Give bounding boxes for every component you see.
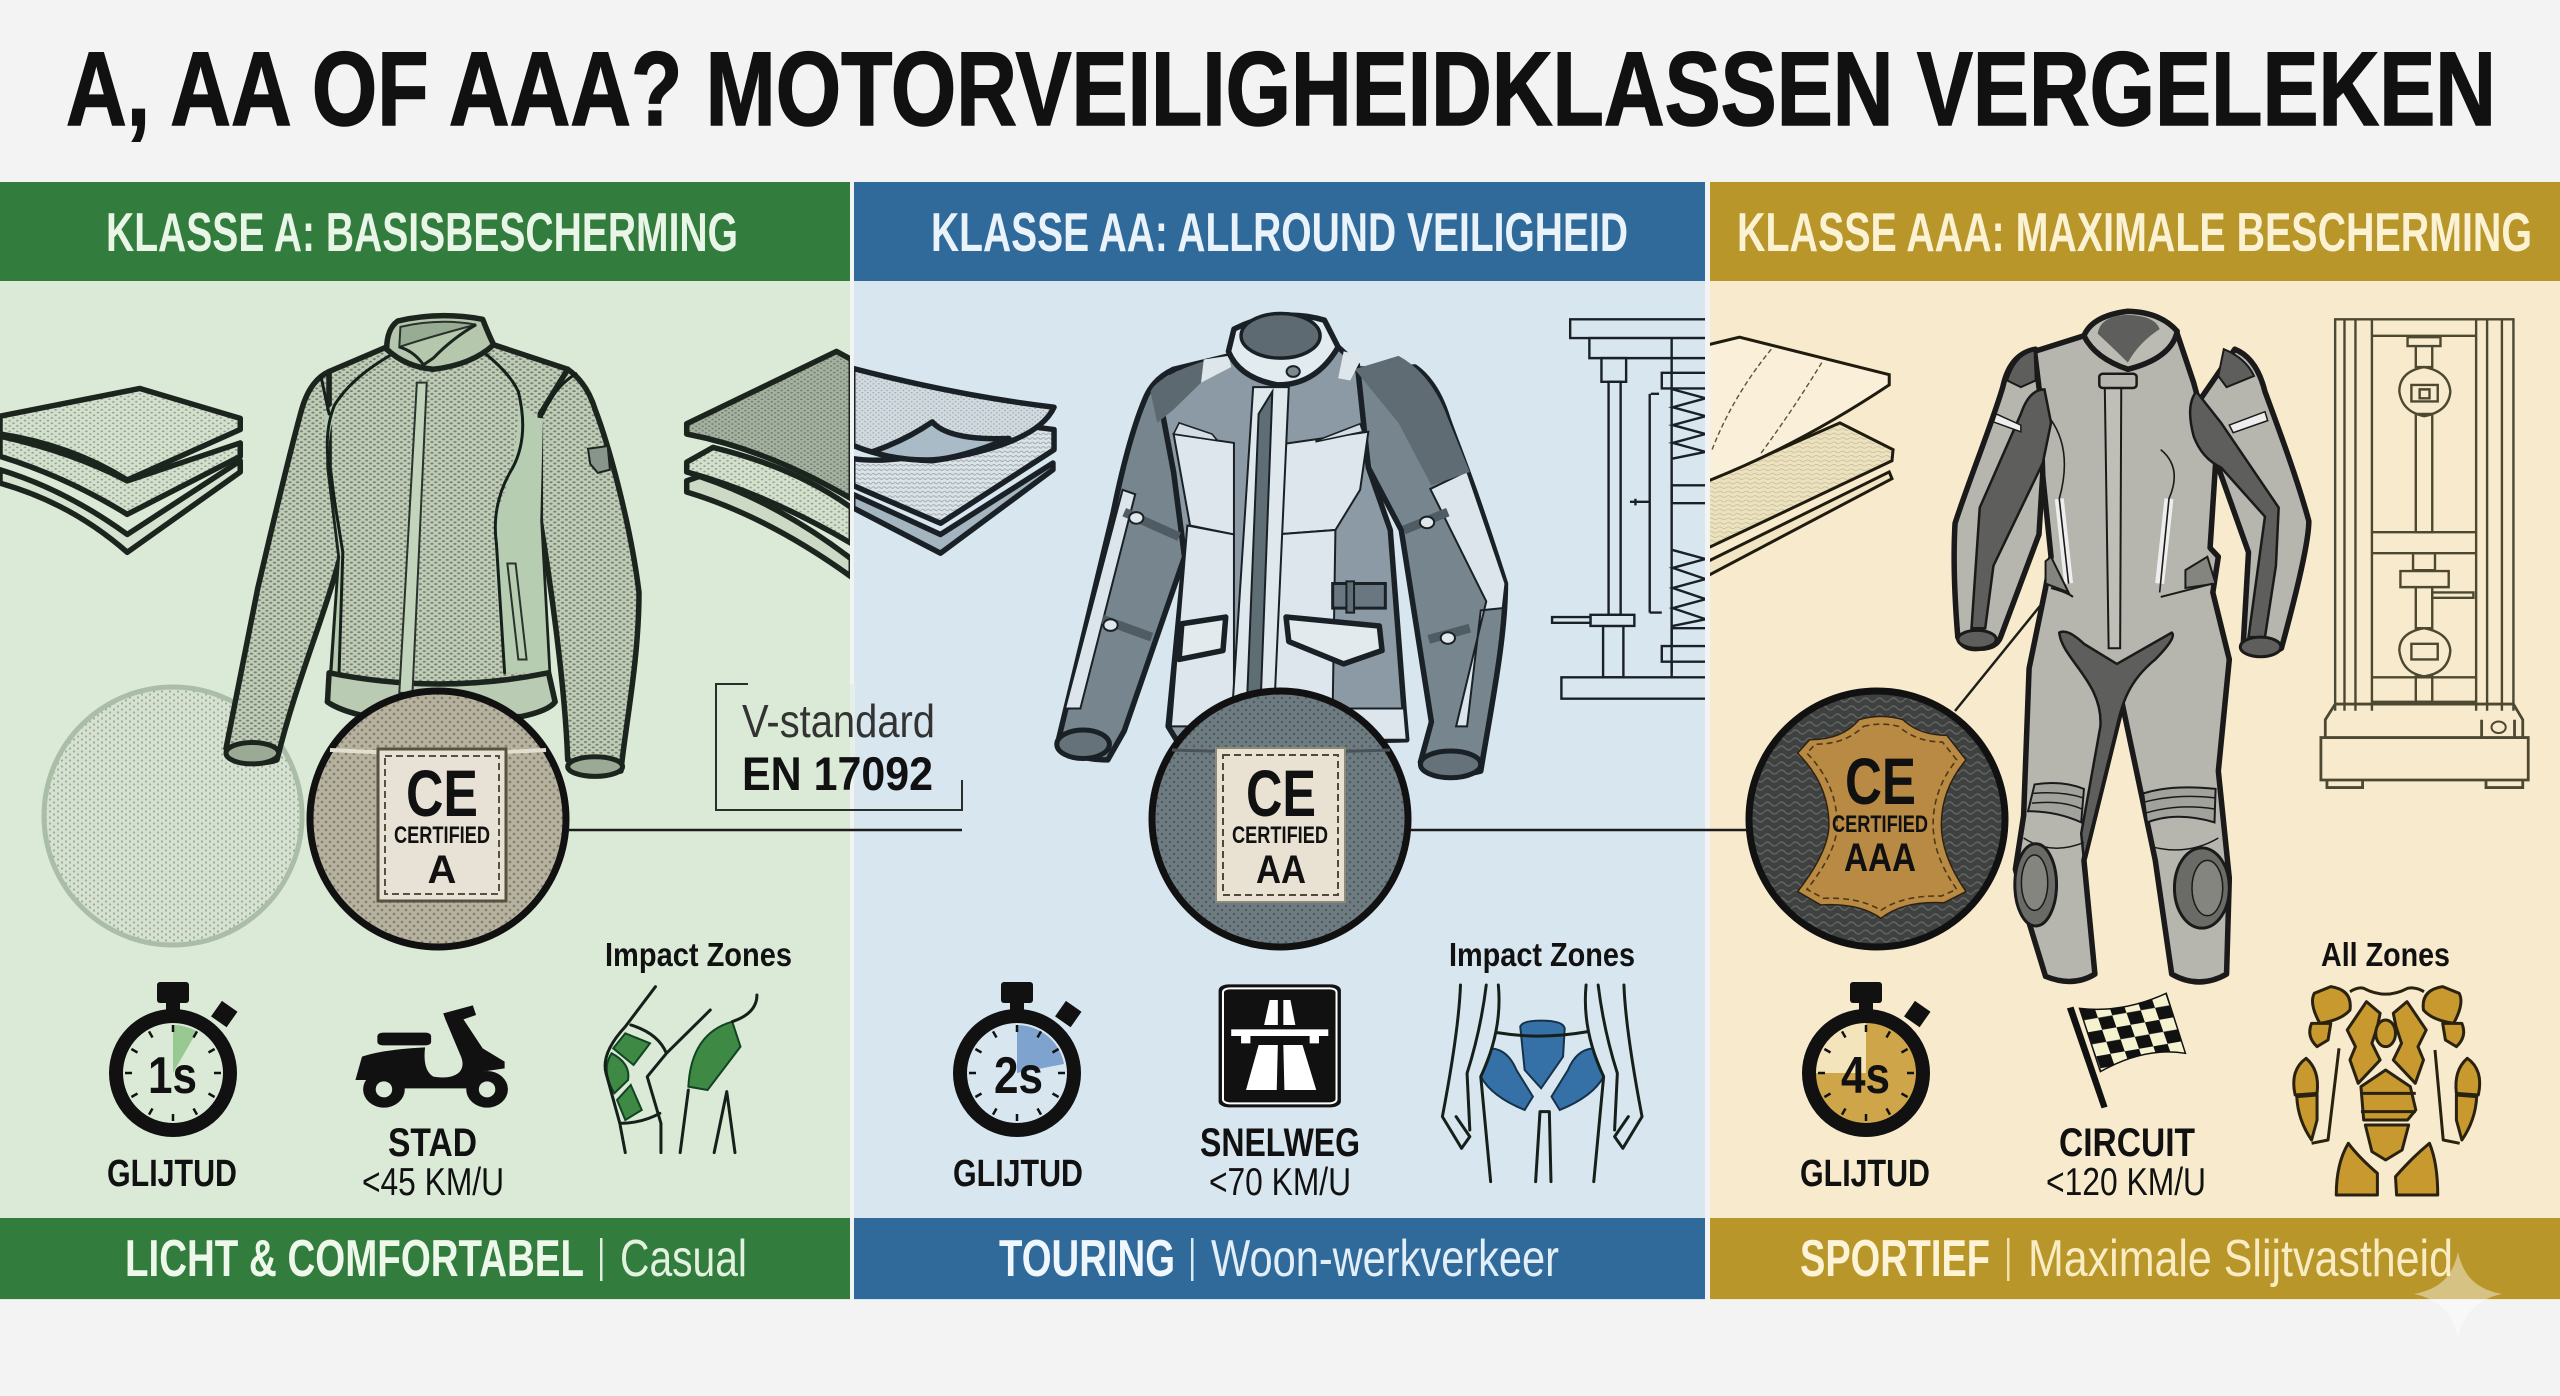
stopwatch 1s [116, 982, 238, 1130]
panel A header [0, 182, 850, 281]
mesh swatch circle [44, 687, 302, 945]
CE badge AAA [1749, 691, 2005, 947]
fabric layers AAA [1708, 337, 1893, 576]
watermark sparkle [2414, 1252, 2502, 1338]
panel AAA footer: SPORTIEF [1800, 1230, 1990, 1288]
panel A footer [0, 1218, 850, 1299]
CE badge AAA: CE [1845, 744, 1916, 818]
fabric layers AA [853, 368, 1054, 553]
CE badge AA: CE [1246, 756, 1316, 830]
panel A footer: Casual [620, 1230, 747, 1288]
icon: full body armour [2294, 987, 2480, 1195]
panel: Klasse AAA [1708, 182, 2560, 1300]
CE badge AAA: CERTIFIED [1832, 811, 1928, 838]
callout: V-standard EN 17092: V-standard [742, 695, 935, 747]
icon: scooter [355, 1005, 508, 1108]
label snelheid A: <45 KM/U [362, 1161, 504, 1204]
panel AAA footer [1710, 1218, 2560, 1299]
stopwatch 4s [1809, 982, 1931, 1130]
label snelweg: SNELWEG [1200, 1121, 1360, 1165]
panel AA background [854, 182, 1705, 1300]
tensile test machine [2321, 319, 2528, 788]
icon: checkered flag [2067, 993, 2185, 1108]
label circuit: CIRCUIT [2059, 1121, 2195, 1165]
panel AA footer: Woon-werkverkeer [1211, 1230, 1559, 1288]
label impact zones A: Impact Zones [605, 936, 792, 973]
icon: hip and back zones [1442, 985, 1642, 1182]
panel AAA background [1710, 182, 2560, 1300]
icon: knee and elbow impact zones [605, 987, 757, 1153]
callout: V-standard EN 17092: EN 17092 [742, 747, 933, 800]
panel: Klasse AA [853, 182, 1715, 1300]
stopwatch value: 2s [994, 1047, 1043, 1105]
CE badge A: CERTIFIED [394, 822, 490, 849]
impact test tower [1552, 319, 1715, 699]
label stad: STAD [388, 1121, 477, 1165]
panel A footer: LICHT & COMFORTABEL [125, 1230, 584, 1288]
icon: motorway sign [1219, 984, 1341, 1107]
stopwatch value: 1s [148, 1047, 197, 1105]
label snelheid AAA: <120 KM/U [2046, 1161, 2206, 1204]
panel AA footer: TOURING [999, 1230, 1175, 1288]
CE badge A [310, 691, 566, 947]
CE badge A: CE [406, 756, 478, 830]
fabric layers left [0, 388, 240, 552]
panel A background [0, 182, 850, 1300]
CE badge A: A [428, 848, 456, 892]
panel AA header [854, 182, 1705, 281]
CE badge AA: AA [1256, 848, 1306, 892]
CE badge AA: CERTIFIED [1232, 822, 1328, 849]
panel AAA footer: Maximale Slijtvastheid [2028, 1230, 2453, 1288]
race suit [1954, 311, 2309, 982]
label glijtijd: GLIJTUD [1800, 1153, 1930, 1195]
stopwatch 2s [960, 982, 1082, 1130]
panel A header: KLASSE A: BASISBESCHERMING [106, 201, 738, 263]
panel AA footer [854, 1218, 1705, 1299]
CE badge AA [1152, 691, 1408, 947]
stopwatch value: 4s [1841, 1047, 1890, 1105]
label glijtijd: GLIJTUD [107, 1153, 237, 1195]
fabric layers right [687, 351, 851, 577]
label impact zones AA: Impact Zones [1449, 936, 1635, 973]
label snelheid AA: <70 KM/U [1209, 1161, 1351, 1204]
label all zones: All Zones [2321, 936, 2450, 973]
panel AA header: KLASSE AA: ALLROUND VEILIGHEID [931, 201, 1628, 263]
label glijtijd: GLIJTUD [953, 1153, 1083, 1195]
connector to suit [1955, 606, 2040, 711]
panel AAA header [1710, 182, 2560, 281]
jacket A [226, 316, 639, 776]
panel: Klasse A [0, 182, 851, 1300]
connector: badge A to badge AA [568, 829, 962, 831]
callout: V-standard EN 17092 [716, 684, 962, 810]
jacket AA [1057, 313, 1505, 778]
CE badge AAA: AAA [1844, 836, 1916, 880]
connector: badge AA to badge AAA [1410, 829, 1747, 831]
